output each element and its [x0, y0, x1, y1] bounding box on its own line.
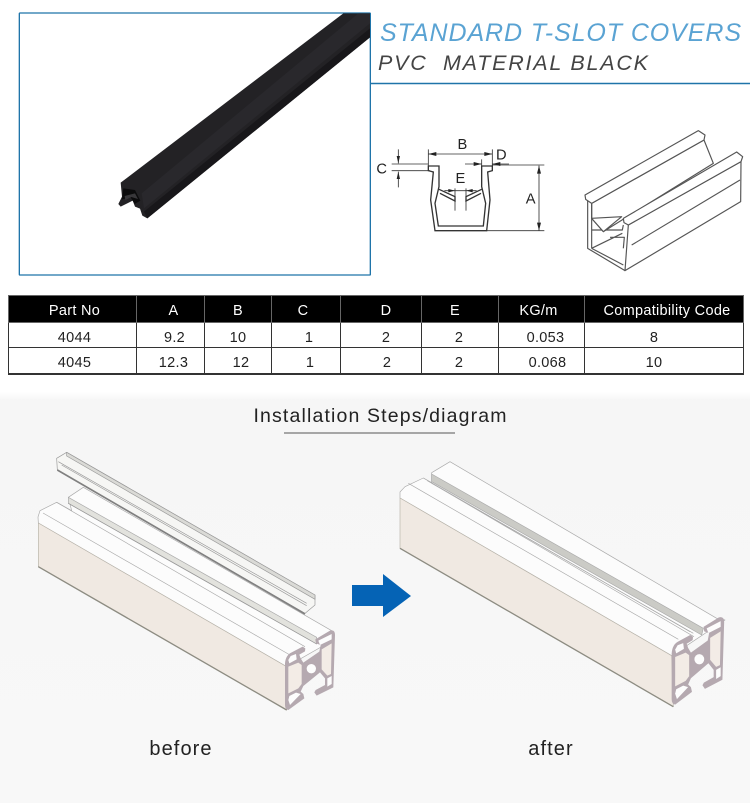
profile end face — [285, 630, 335, 710]
specification table: A — [168, 303, 178, 319]
dimension diagram — [376, 137, 544, 231]
dimension labels: C — [376, 162, 387, 178]
heading underline — [284, 432, 455, 434]
specification table: 12 — [233, 355, 249, 371]
panel: product photo — [19, 13, 370, 275]
header rule — [370, 82, 750, 84]
specification table: B — [233, 303, 243, 319]
specification table: Compatibility Code — [603, 303, 731, 319]
dimension labels: D — [496, 147, 507, 163]
specification table: 4044 — [58, 330, 91, 346]
specification table: 2 — [455, 355, 463, 371]
specification table: D — [381, 303, 391, 319]
specification table: 0.068 — [529, 355, 566, 371]
3D cover drawing — [585, 131, 743, 271]
profile end face — [672, 617, 724, 705]
title: STANDARD T-SLOT COVERS — [380, 19, 741, 47]
arrow — [352, 574, 411, 617]
specification table: 10 — [646, 355, 662, 371]
before illustration — [38, 452, 335, 710]
dimension labels: E — [455, 171, 465, 187]
subtitle: PVC MATERIAL BLACK — [378, 51, 650, 75]
specification table: 8 — [650, 330, 658, 346]
before label: before — [149, 738, 213, 760]
specification table: 2 — [382, 330, 390, 346]
specification table: 1 — [305, 330, 313, 346]
specification table: 2 — [455, 330, 463, 346]
installation section background — [0, 392, 750, 803]
specification table: Part No — [49, 303, 100, 319]
after label: after — [528, 738, 574, 760]
dimension labels — [376, 137, 536, 208]
installation heading: Installation Steps/diagram — [254, 405, 506, 427]
black cover strip — [118, 13, 370, 218]
specification table: 2 — [383, 355, 391, 371]
after illustration — [400, 462, 725, 707]
specification table: 4045 — [58, 355, 91, 371]
aluminium profile — [38, 487, 333, 710]
specification table — [8, 295, 744, 374]
specification table: E — [450, 303, 460, 319]
specification table: 1 — [306, 355, 314, 371]
specification table: KG/m — [519, 303, 558, 319]
specification table: 10 — [230, 330, 246, 346]
specification table: 12.3 — [159, 355, 188, 371]
specification table: 9.2 — [164, 330, 185, 346]
slot cover strip — [57, 452, 315, 614]
dimension labels: A — [526, 192, 536, 208]
specification table: 0.053 — [527, 330, 564, 346]
dimension labels: B — [457, 137, 467, 153]
specification table: C — [298, 303, 308, 319]
assembled profile — [400, 462, 725, 707]
